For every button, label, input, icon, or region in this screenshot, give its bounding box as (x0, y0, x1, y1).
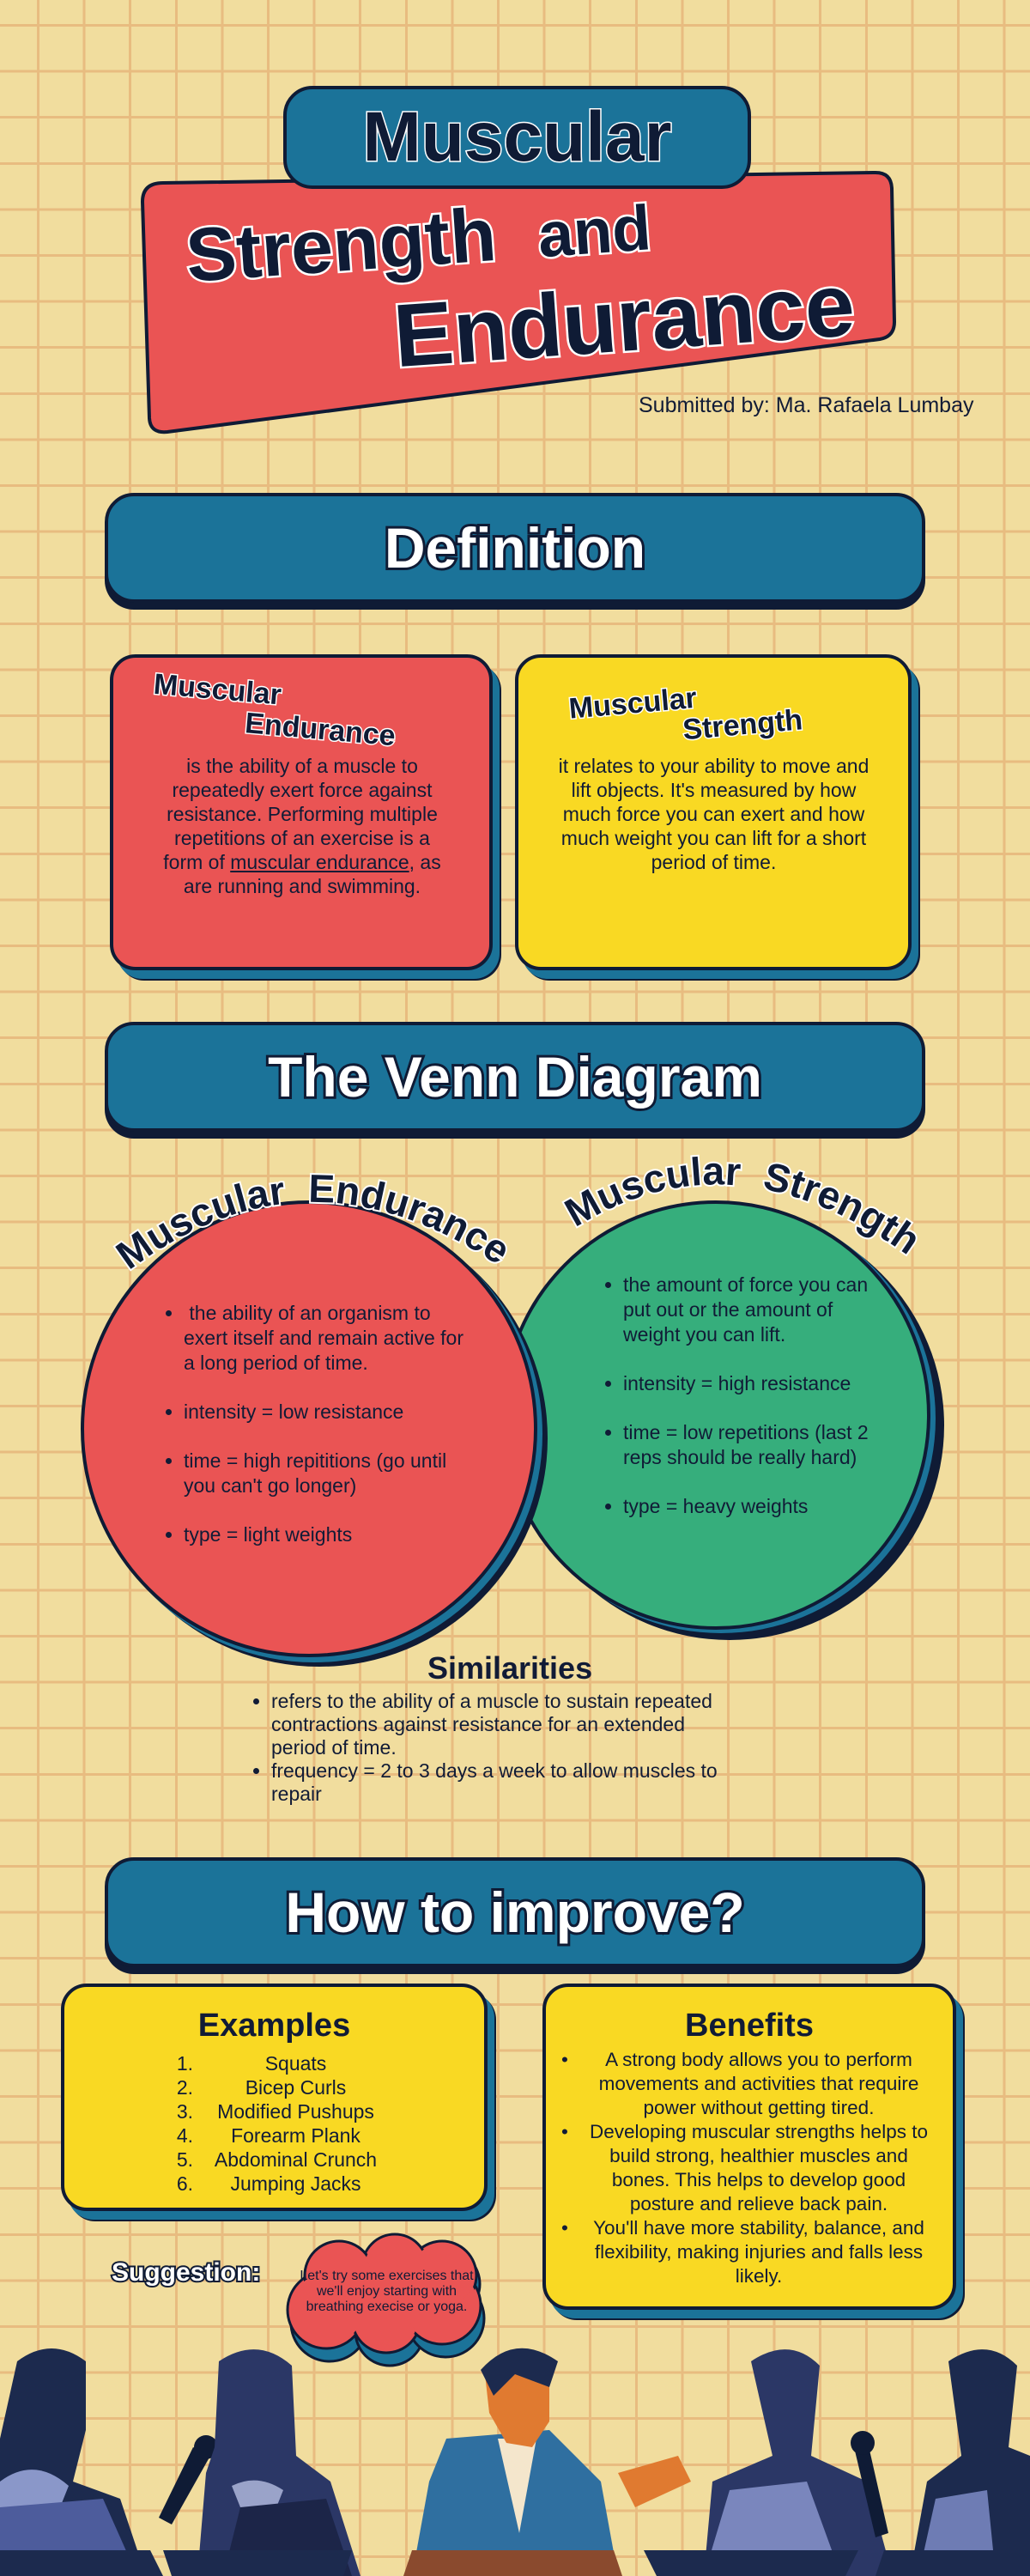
speaker center (412, 2348, 691, 2576)
examples list: 5. (177, 2148, 193, 2171)
person left 2 (197, 2349, 360, 2576)
examples list: Squats (265, 2052, 326, 2075)
person right 1 (704, 2349, 893, 2576)
title text lines: Strength and (183, 191, 653, 298)
circle: muscular endurance (82, 1202, 548, 1667)
heading: Definition: Definition (385, 516, 645, 580)
benefits list: You'll have more stability, balance, and flexibility, making injuries and falls less likely. (593, 2217, 924, 2287)
endurance bullets: time = high repititions (go until you can't go longer) (184, 1449, 446, 1497)
person left 1 (0, 2348, 146, 2576)
examples list: Abdominal Crunch (215, 2148, 377, 2171)
benefits list (561, 2049, 928, 2287)
examples list: Modified Pushups (217, 2100, 374, 2123)
venn diagram (81, 1154, 944, 1667)
benefits list: Developing muscular strengths helps to build strong, healthier muscles and bones. This helps to develop good posture and relieve back pain. (590, 2121, 928, 2215)
card title: Endurance (244, 707, 397, 752)
strength bullets: intensity = high resistance (623, 1372, 851, 1394)
strength bullets (605, 1273, 869, 1517)
heading: The Venn Diagram (105, 1022, 925, 1132)
endurance bullets: intensity = low resistance (184, 1400, 403, 1423)
panel: muscular endurance definition (110, 654, 493, 970)
benefits list: • (561, 2217, 568, 2239)
title text lines: Endurance (391, 255, 857, 386)
similarities bullets: frequency = 2 to 3 days a week to allow muscles to repair (271, 1759, 718, 1805)
endurance bullets (166, 1302, 464, 1546)
suggestion label: Suggestion: (112, 2258, 260, 2287)
examples list: 3. (177, 2100, 193, 2123)
submitted by: Submitted by: Ma. Rafaela Lumbay (639, 393, 973, 417)
benefits list: • (561, 2049, 568, 2070)
similarities (253, 1650, 718, 1805)
microphone (159, 2435, 218, 2524)
benefits heading: Benefits (685, 2008, 814, 2044)
examples list: Bicep Curls (245, 2076, 346, 2099)
endurance bullets: type = light weights (184, 1523, 352, 1546)
circle: muscular strength (503, 1202, 944, 1640)
benefits list: A strong body allows you to perform movements and activities that require power without getting tired. (599, 2049, 918, 2118)
examples list: 1. (177, 2052, 193, 2075)
endurance bullets: the ability of an organism to exert itself and remain active for a long period of time. (184, 1302, 464, 1374)
label: Muscular Strength arc: Muscular Strength (561, 1154, 918, 1257)
callout: suggestion cloud (287, 2233, 486, 2366)
heading: How to improve? (105, 1857, 925, 1967)
callout: suggestion cloud: Let's try some exercises that we'll enjoy starting with breathing execise or yoga. (300, 2269, 474, 2314)
panel: muscular strength definition (515, 654, 912, 970)
card text: it relates to your ability to move and lift objects. It's measured by how much force you can exert and how much weight you can lift for a short period of time. (559, 755, 869, 873)
strength bullets: time = low repetitions (last 2 reps should be really hard) (623, 1421, 869, 1468)
strength bullets: type = heavy weights (623, 1495, 808, 1517)
similarities bullets (253, 1690, 718, 1805)
desks (0, 2550, 1030, 2576)
card text: is the ability of a muscle to repeatedly exert force against resistance. Performing multiple repetitions of an exercise is a form of muscular endurance, as are running and swimming. (163, 755, 441, 897)
examples list: 6. (177, 2172, 193, 2195)
teal title panel: Muscular (362, 98, 671, 176)
heading: How to improve?: How to improve? (285, 1880, 745, 1944)
examples list: Forearm Plank (231, 2124, 360, 2147)
panel: benefits (542, 1984, 956, 2310)
label: Muscular Endurance arc: Muscular Endurance (113, 1173, 507, 1272)
examples list: 4. (177, 2124, 193, 2147)
similarities bullets: refers to the ability of a muscle to sustain repeated contractions against resistance for an extended period of time. (271, 1690, 712, 1759)
strength bullets: the amount of force you can put out or the amount of weight you can lift. (623, 1273, 868, 1346)
panel: examples (61, 1984, 488, 2211)
red title panel (141, 171, 896, 434)
card title: Muscular (567, 682, 698, 726)
heading: Definition (105, 493, 925, 603)
title: Muscular Strength and Endurance (141, 86, 896, 434)
heading: The Venn Diagram: The Venn Diagram (268, 1045, 762, 1109)
benefits list: • (561, 2121, 568, 2142)
examples list: 2. (177, 2076, 193, 2099)
card title (152, 668, 397, 752)
teal title panel (283, 86, 751, 189)
card title: Strength (682, 703, 803, 746)
illustration: people at panel (0, 2348, 1030, 2576)
examples heading: Examples (198, 2008, 350, 2044)
card title (567, 682, 803, 746)
card title: Muscular (152, 668, 282, 712)
examples list (177, 2052, 377, 2195)
person right 2 (910, 2349, 1030, 2576)
title text lines (183, 191, 857, 386)
similarities heading: Similarities (427, 1650, 592, 1686)
examples list: Jumping Jacks (230, 2172, 361, 2195)
